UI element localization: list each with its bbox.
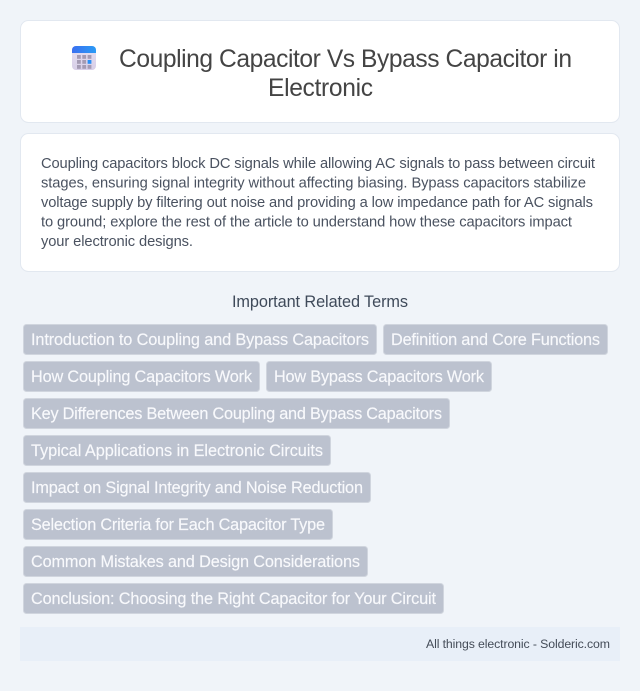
heading: important related terms: Important Related Terms xyxy=(232,293,408,311)
tag: common mistakes: Common Mistakes and Design Considerations xyxy=(31,553,360,571)
tag: key differences: Key Differences Between Coupling and Bypass Capacitors xyxy=(31,405,442,423)
tag: how coupling xyxy=(24,362,260,392)
tag: how bypass xyxy=(266,362,492,392)
tag: typical applications: Typical Applications in Electronic Circuits xyxy=(31,442,323,460)
tag: common mistakes xyxy=(24,546,368,576)
tag: key differences xyxy=(24,398,450,428)
title: Coupling Capacitor Vs Bypass Capacitor in xyxy=(119,46,572,73)
title xyxy=(119,46,572,102)
text block: description: to ground; explore the rest of the article to understand how these capacitors impact xyxy=(41,214,572,230)
panel: header card xyxy=(20,20,620,122)
tag: definition xyxy=(384,324,608,354)
text block: description: stages, ensuring signal integrity without affecting biasing. Bypass capacitors stabilize xyxy=(41,176,586,192)
icon: calendar xyxy=(72,46,96,70)
tag: introduction xyxy=(24,324,376,354)
tag: selection: Selection Criteria for Each Capacitor Type xyxy=(31,516,325,534)
footer: All things electronic - Solderic.com xyxy=(426,637,610,651)
footer xyxy=(20,627,620,661)
tag: impact xyxy=(24,472,370,502)
text block: description: voltage supply by filtering out noise and providing a low impedance path for AC signals xyxy=(41,195,593,211)
tag list xyxy=(24,324,608,614)
tag: introduction: Introduction to Coupling and Bypass Capacitors xyxy=(31,331,369,349)
tag: typical applications xyxy=(24,436,330,466)
tag: how bypass: How Bypass Capacitors Work xyxy=(274,368,485,386)
tag: selection xyxy=(24,510,332,540)
text block: description xyxy=(41,156,595,250)
text block: description: Coupling capacitors block DC signals while allowing AC signals to pass between circuit xyxy=(41,156,595,172)
text block: description: your electronic designs. xyxy=(41,234,193,250)
tag: definition: Definition and Core Functions xyxy=(391,331,600,349)
panel: description card xyxy=(20,134,620,272)
tag: conclusion: Conclusion: Choosing the Right Capacitor for Your Circuit xyxy=(31,590,436,608)
tag: how coupling: How Coupling Capacitors Work xyxy=(31,368,253,386)
title: Electronic xyxy=(268,75,373,102)
tag: conclusion xyxy=(24,584,444,614)
tag: impact: Impact on Signal Integrity and Noise Reduction xyxy=(31,479,363,497)
